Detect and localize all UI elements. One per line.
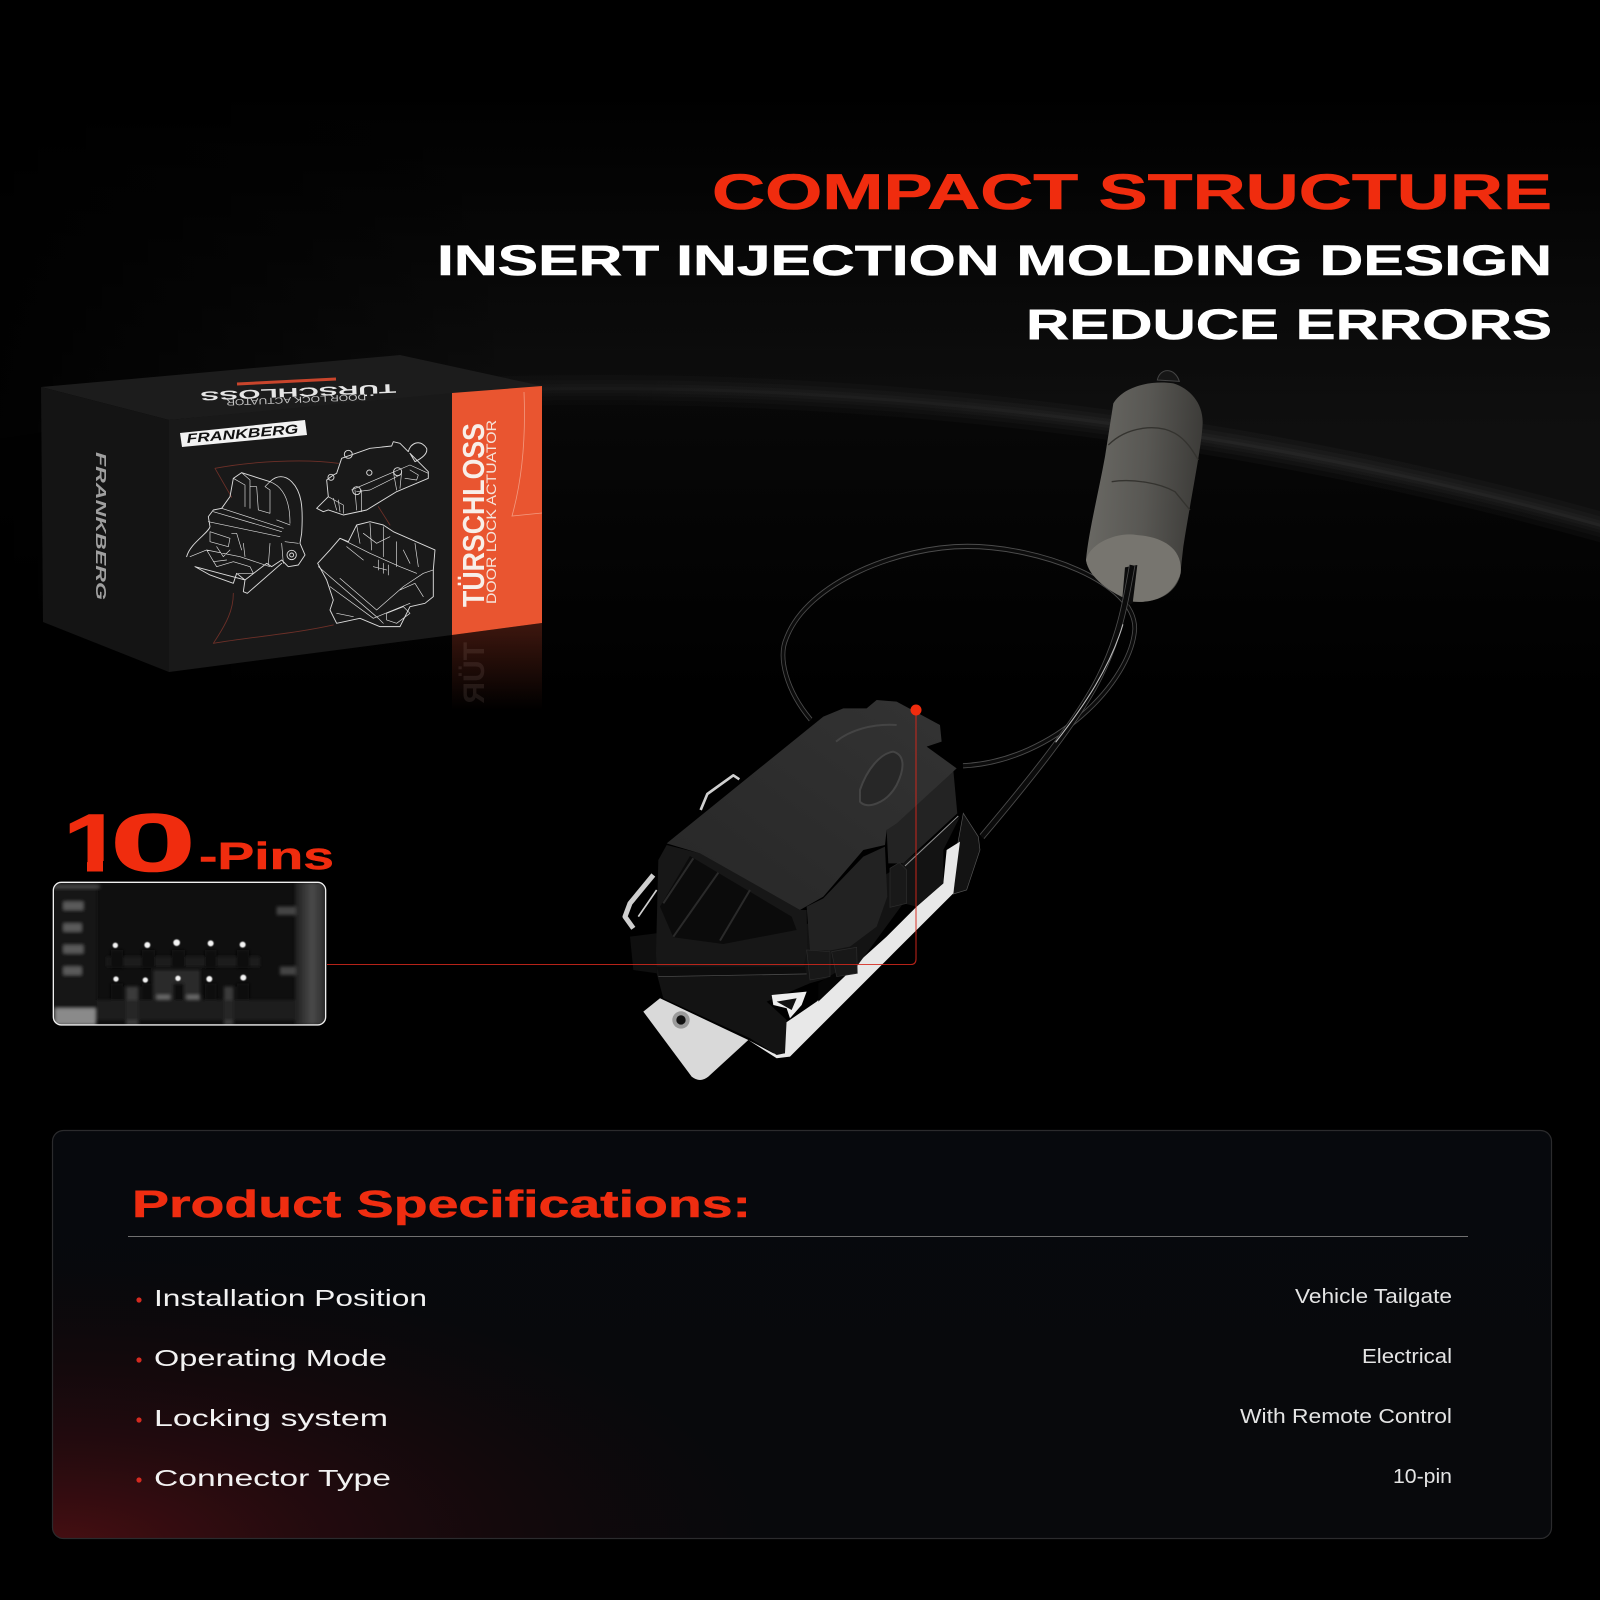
panel heading: Product Specifications: — [132, 1184, 751, 1226]
box subtitle: DOOR LOCK ACTUATOR — [483, 420, 499, 604]
vent ribs — [663, 858, 750, 941]
side clip — [630, 933, 657, 973]
line art of actuators — [187, 442, 435, 643]
callout heading: 10-Pins: 0 — [110, 798, 196, 889]
line art: latch — [187, 473, 305, 593]
box reflection: TÜR — [458, 642, 491, 704]
background with curved horizon glow — [0, 0, 1600, 800]
spec row: connector type: Connector Type — [154, 1465, 391, 1491]
lid top — [667, 700, 957, 910]
line art: lock module — [318, 522, 435, 627]
faint red outline shape — [213, 461, 390, 643]
title block — [437, 164, 1552, 349]
box faces — [41, 355, 542, 672]
spec row: connector type: 10-pin — [1393, 1466, 1452, 1488]
side brand text: FRANKBERG — [92, 452, 109, 600]
box title: TÜRSCHLOSS — [456, 423, 491, 607]
spec row: locking system: With Remote Control — [1240, 1406, 1452, 1428]
lid details — [836, 725, 903, 805]
brand label — [180, 420, 307, 447]
housing seam band — [657, 967, 807, 977]
callout heading: 10-Pins: 1 — [63, 798, 123, 889]
left chrome clips — [625, 775, 739, 928]
spec row: operating mode: Electrical — [1362, 1346, 1452, 1368]
spec row: connector type — [136, 1465, 1452, 1491]
foam cable sleeve — [1086, 371, 1203, 607]
connector block — [807, 947, 857, 980]
chrome mounting plate — [643, 998, 748, 1080]
spec row: locking system: Locking system — [154, 1405, 388, 1431]
callout dot — [910, 704, 922, 716]
panel arc detail — [512, 392, 542, 516]
wire bundle — [982, 565, 1132, 837]
spec row: operating mode — [136, 1345, 1452, 1371]
chrome side bracket — [748, 842, 960, 1058]
brand label: FRANKBERG — [186, 421, 299, 446]
callout heading: 10-Pins — [60, 798, 334, 889]
top flipped text — [200, 379, 396, 407]
mounting hole — [672, 1011, 690, 1029]
motor dome — [807, 847, 887, 951]
right clamp — [953, 813, 980, 894]
panel: product specifications — [52, 1130, 1552, 1538]
lower housing — [657, 817, 960, 1055]
top flipped text: TÜRSCHLOSS — [200, 381, 396, 402]
bracket notch — [772, 992, 807, 1018]
product packaging box — [41, 355, 542, 710]
connector photo inset — [53, 882, 326, 1025]
spec row: installation position: Vehicle Tailgate — [1295, 1286, 1452, 1308]
top flipped text: DOOR LOCK ACTUATOR — [226, 391, 366, 407]
orange end panel — [452, 386, 542, 635]
spec row: operating mode: Operating Mode — [154, 1345, 387, 1371]
title: compact structure: COMPACT STRUCTURE — [712, 164, 1552, 220]
front vent housing — [656, 845, 807, 967]
callout leader line — [327, 710, 916, 964]
spec row: locking system — [136, 1405, 1452, 1431]
subtitle line 1: INSERT INJECTION MOLDING DESIGN — [437, 237, 1552, 285]
box reflection — [452, 623, 542, 710]
main product: door lock actuator — [625, 700, 980, 1080]
vent opening — [660, 856, 797, 944]
subtitle line 2: REDUCE ERRORS — [1026, 301, 1552, 349]
line art: top actuator — [317, 442, 428, 515]
callout heading: 10-Pins: -Pins — [199, 836, 334, 878]
spec row: installation position — [136, 1285, 1452, 1311]
spec row: installation position: Installation Position — [154, 1285, 427, 1311]
wire loop — [783, 546, 1135, 766]
side wall — [887, 770, 957, 863]
screw post — [890, 863, 907, 907]
